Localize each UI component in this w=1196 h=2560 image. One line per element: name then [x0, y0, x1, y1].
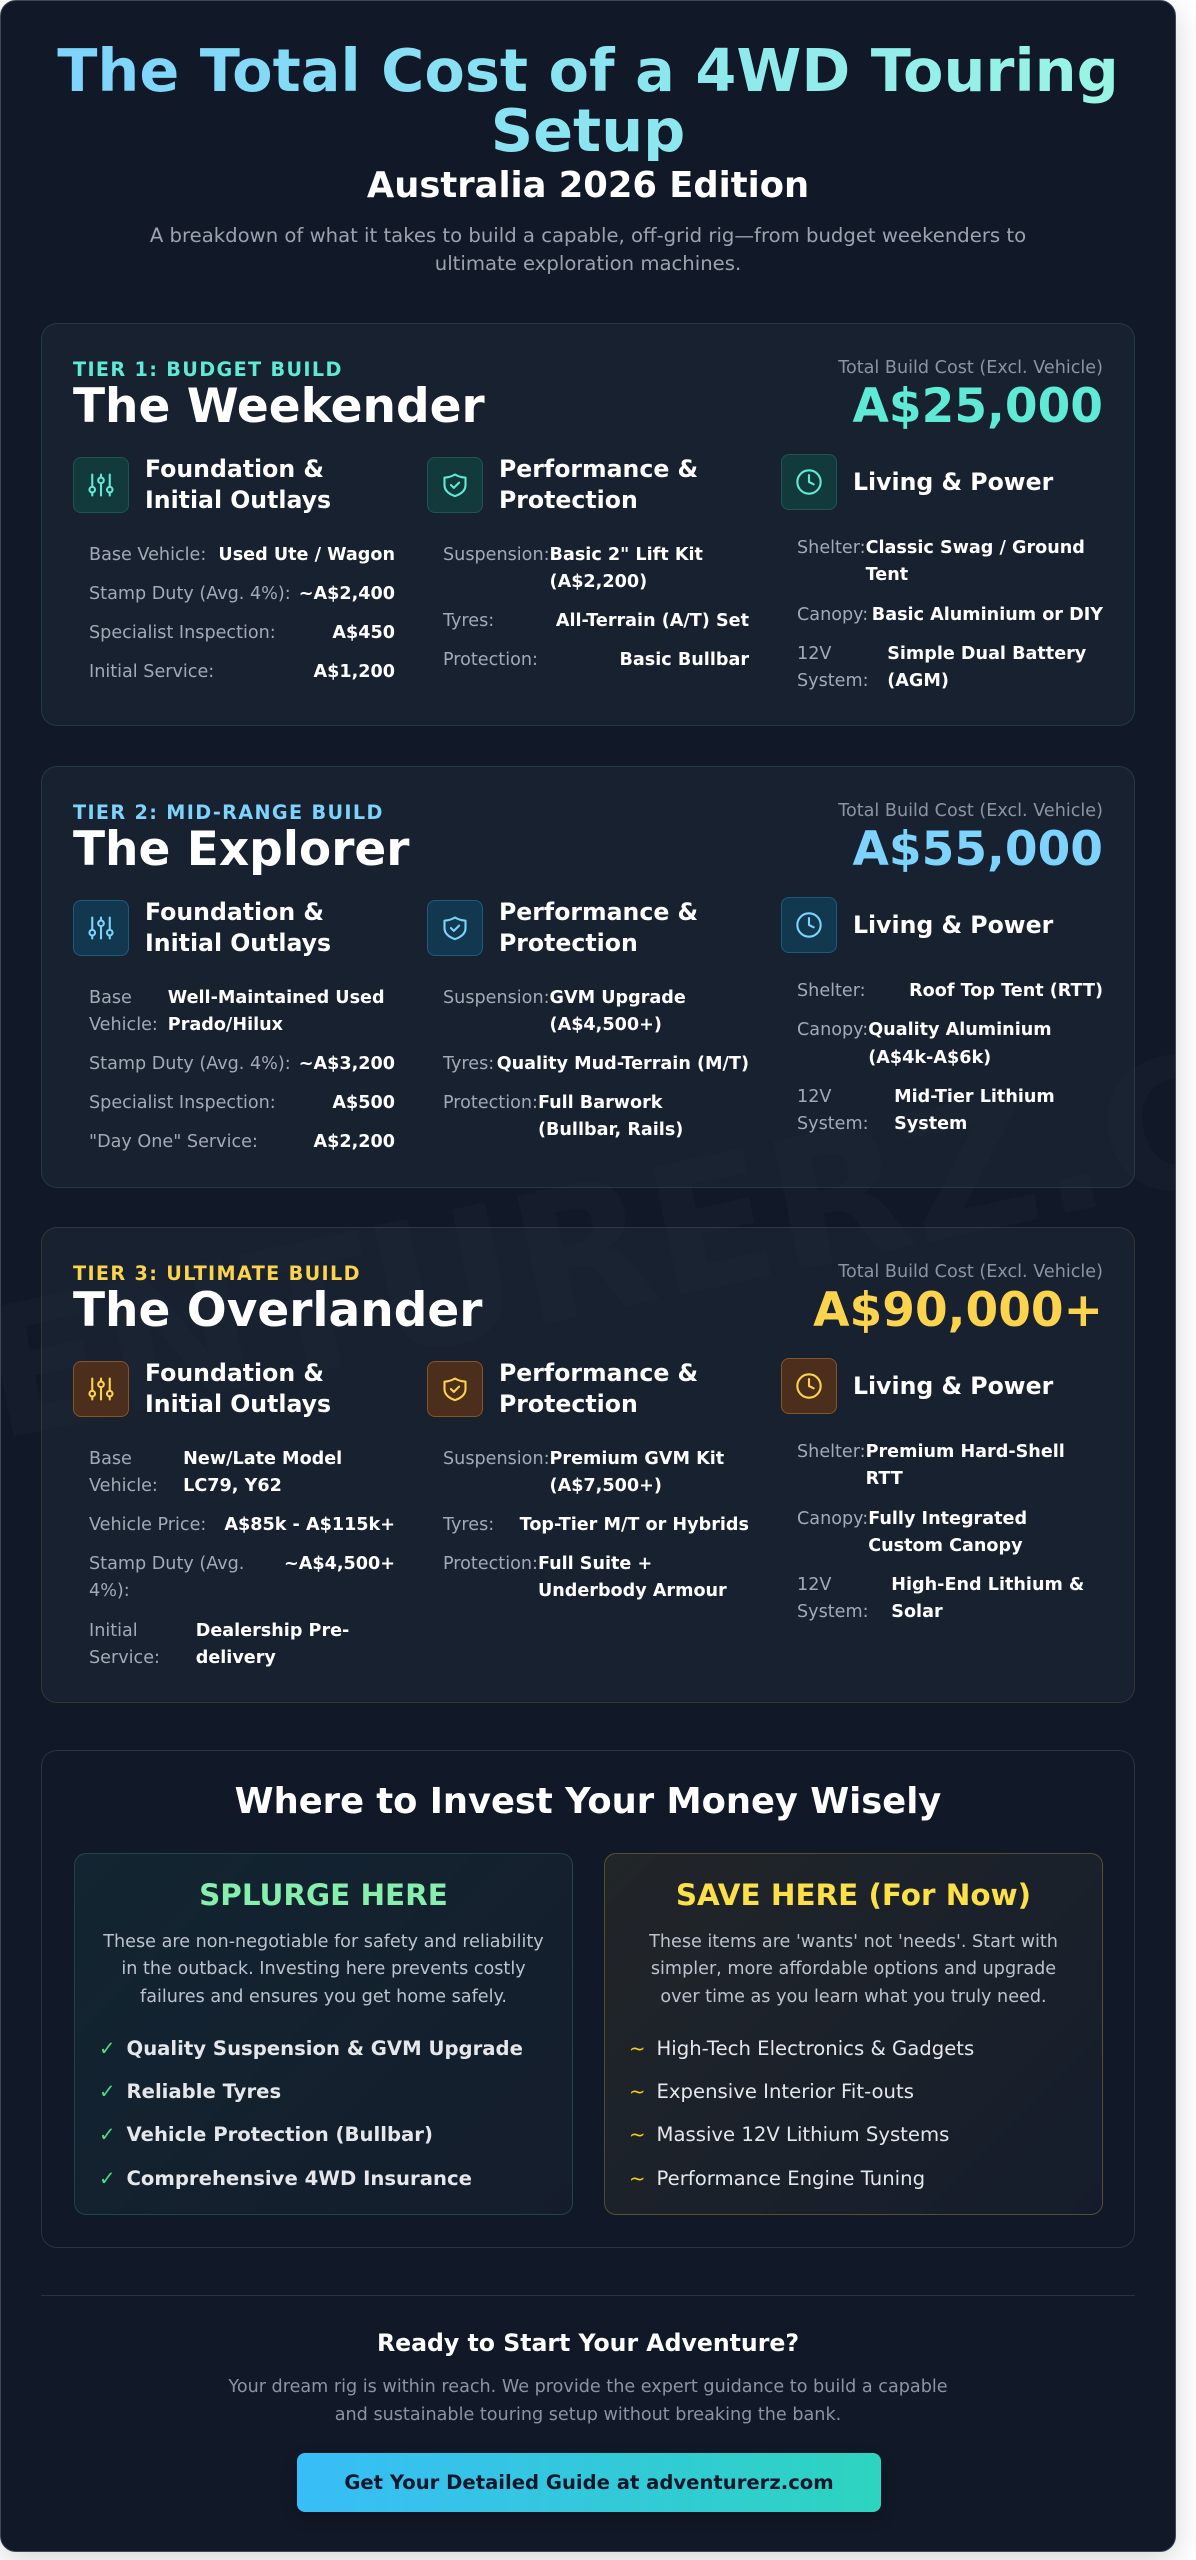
cost rows: Base Vehicle:	[89, 988, 158, 1035]
cost rows: Canopy:	[797, 1020, 868, 1040]
cost rows: ~A$4,500+	[284, 1554, 395, 1574]
panel: tier 1 the weekender	[41, 323, 1135, 726]
tier 3 header: TIER 3: ULTIMATE BUILD	[73, 1262, 361, 1285]
tier 1 header: The Weekender	[73, 379, 485, 434]
cta button	[297, 2453, 881, 2512]
cost rows: New/Late Model LC79, Y62	[183, 1449, 342, 1496]
tier 3 columns	[73, 1358, 1084, 1668]
save description: These items are 'wants' not 'needs'. Start with simpler, more affordable options and upgrade over time as you learn what you truly need.	[649, 1932, 1058, 2007]
cost rows: Quality Mud-Terrain (M/T)	[497, 1054, 749, 1074]
cost rows: Base Vehicle:	[89, 545, 206, 565]
splurge list: Comprehensive 4WD Insurance	[126, 2167, 472, 2190]
heading: living	[781, 1358, 1054, 1414]
splurge list	[99, 2037, 523, 2190]
cost rows: Tyres:	[443, 611, 494, 631]
heading: living	[781, 454, 1054, 510]
save list: High-Tech Electronics & Gadgets	[656, 2037, 974, 2060]
cost rows: High-End Lithium & Solar	[891, 1575, 1084, 1622]
cost rows: 12V System:	[797, 644, 869, 691]
splurge list: Vehicle Protection (Bullbar)	[126, 2123, 433, 2146]
cost rows: A$85k - A$115k+	[224, 1515, 395, 1535]
cost rows: Specialist Inspection:	[89, 1093, 276, 1113]
cost rows: Mid-Tier Lithium System	[894, 1087, 1055, 1134]
cost rows: Suspension:	[443, 545, 550, 565]
heading: living: Living & Power	[853, 1372, 1053, 1400]
cost rows: Canopy:	[797, 1509, 868, 1529]
cost rows: Suspension:	[443, 1449, 550, 1469]
heading: living	[781, 897, 1054, 953]
cost rows: Premium GVM Kit (A$7,500+)	[550, 1449, 724, 1496]
save list: Massive 12V Lithium Systems	[656, 2123, 949, 2146]
cost rows: Classic Swag / Ground Tent	[866, 538, 1085, 585]
heading: living: Living & Power	[853, 468, 1053, 496]
footer call to action	[228, 2329, 948, 2424]
tier 1 header: Total Build Cost (Excl. Vehicle)	[838, 358, 1103, 378]
cost rows: Full Suite + Underbody Armour	[538, 1554, 727, 1601]
splurge list: Quality Suspension & GVM Upgrade	[126, 2037, 523, 2060]
cost rows	[442, 1449, 749, 1601]
cost rows	[89, 1449, 395, 1668]
heading: foundation: Foundation & Initial Outlays	[145, 455, 331, 514]
cost rows: Used Ute / Wagon	[218, 545, 395, 565]
cost rows	[89, 988, 395, 1152]
save list: Expensive Interior Fit-outs	[656, 2080, 914, 2103]
cost rows	[442, 545, 749, 670]
tier 1 header: TIER 1: BUDGET BUILD	[73, 358, 343, 381]
cost rows: Well-Maintained Used Prado/Hilux	[168, 988, 385, 1035]
cost rows: Base Vehicle:	[89, 1449, 158, 1496]
footer heading: Ready to Start Your Adventure?	[377, 2329, 799, 2357]
cost rows: Basic Bullbar	[620, 650, 749, 670]
cost rows: Protection:	[443, 1554, 538, 1574]
column: foundation	[73, 455, 395, 682]
save list: ~	[629, 2037, 645, 2060]
cost rows: 12V System:	[797, 1087, 869, 1134]
cost rows: ~A$2,400	[299, 584, 395, 604]
cost rows: Roof Top Tent (RTT)	[909, 981, 1103, 1001]
splurge list: ✓	[99, 2080, 115, 2103]
tier 3 header: A$90,000+	[813, 1283, 1103, 1338]
footer text: Your dream rig is within reach. We provide the expert guidance to build a capable and sustainable touring setup without breaking the bank.	[228, 2377, 948, 2424]
heading: living: Living & Power	[853, 911, 1053, 939]
cost rows: GVM Upgrade (A$4,500+)	[550, 988, 686, 1035]
tier 2 columns	[73, 897, 1103, 1152]
cost rows: "Day One" Service:	[89, 1132, 258, 1152]
subtitle: Australia 2026 Edition	[367, 165, 809, 206]
cost rows: A$1,200	[313, 662, 395, 682]
tier 2 header	[73, 801, 1103, 877]
cost rows: Basic Aluminium or DIY	[872, 605, 1103, 625]
save heading: SAVE HERE (For Now)	[676, 1878, 1031, 1912]
cost rows: Stamp Duty (Avg. 4%):	[89, 1054, 291, 1074]
save list: ~	[629, 2080, 645, 2103]
tier 2 header: Total Build Cost (Excl. Vehicle)	[838, 801, 1103, 821]
splurge list: Reliable Tyres	[126, 2080, 281, 2103]
cost rows: Dealership Pre-delivery	[196, 1621, 349, 1668]
save list: ~	[629, 2167, 645, 2190]
column: living	[781, 454, 1104, 691]
cost rows: Full Barwork (Bullbar, Rails)	[538, 1093, 683, 1140]
panel: tier 3 the overlander	[41, 1227, 1135, 1703]
tier 3 header	[73, 1262, 1103, 1338]
cost rows: Suspension:	[443, 988, 550, 1008]
cost rows: Shelter:	[797, 1442, 866, 1462]
cost rows	[797, 981, 1103, 1134]
tier 1 columns	[73, 454, 1104, 691]
cost rows: Basic 2" Lift Kit (A$2,200)	[550, 545, 703, 592]
cost rows: A$450	[332, 623, 395, 643]
heading: performance: Performance & Protection	[499, 898, 698, 957]
panel: splurge here	[74, 1853, 573, 2215]
panel: where to invest	[41, 1750, 1135, 2248]
panel: tier 2 the explorer	[41, 766, 1135, 1188]
cost rows: Tyres:	[443, 1515, 494, 1535]
save list	[629, 2037, 974, 2190]
splurge list: ✓	[99, 2037, 115, 2060]
intro text: A breakdown of what it takes to build a capable, off-grid rig—from budget weekenders to ultimate exploration machines.	[150, 224, 1026, 274]
cost rows	[89, 545, 395, 682]
cost rows: ~A$3,200	[299, 1054, 395, 1074]
tier 1 header	[73, 358, 1103, 434]
column: living	[781, 1358, 1084, 1622]
cost rows: 12V System:	[797, 1575, 869, 1622]
cost rows	[442, 988, 749, 1140]
cost rows: Canopy:	[797, 605, 868, 625]
title: The Total Cost of a 4WD Touring Setup	[57, 36, 1119, 165]
cost rows: Top-Tier M/T or Hybrids	[520, 1515, 749, 1535]
heading: foundation: Foundation & Initial Outlays	[145, 1359, 331, 1418]
cost rows: Stamp Duty (Avg. 4%):	[89, 584, 291, 604]
cost rows: Vehicle Price:	[89, 1515, 206, 1535]
tier 2 header: The Explorer	[73, 822, 409, 877]
heading: foundation: Foundation & Initial Outlays	[145, 898, 331, 957]
cost rows: Protection:	[443, 1093, 538, 1113]
splurge list: ✓	[99, 2167, 115, 2190]
cta button: Get Your Detailed Guide at adventurerz.com	[344, 2471, 834, 2494]
tier 2 header: A$55,000	[853, 822, 1103, 877]
column: foundation	[73, 898, 395, 1152]
cost rows: Shelter:	[797, 538, 866, 558]
cost rows: Initial Service:	[89, 662, 214, 682]
panel: save here	[604, 1853, 1103, 2215]
cost rows: All-Terrain (A/T) Set	[556, 611, 749, 631]
cost rows: Shelter:	[797, 981, 866, 1001]
cost rows: Initial Service:	[89, 1621, 160, 1668]
splurge list: ✓	[99, 2123, 115, 2146]
cost rows	[797, 538, 1104, 691]
cost rows: Stamp Duty (Avg. 4%):	[89, 1554, 244, 1601]
invest heading: Where to Invest Your Money Wisely	[235, 1781, 941, 1822]
save list: ~	[629, 2123, 645, 2146]
column: performance	[427, 1359, 749, 1601]
cost rows: Specialist Inspection:	[89, 623, 276, 643]
cost rows: Quality Aluminium (A$4k-A$6k)	[868, 1020, 1052, 1068]
tier 3 header: The Overlander	[73, 1283, 482, 1338]
cost rows: A$500	[332, 1093, 395, 1113]
tier 3 header: Total Build Cost (Excl. Vehicle)	[838, 1262, 1103, 1282]
cost rows: Fully Integrated Custom Canopy	[868, 1509, 1027, 1556]
splurge heading: SPLURGE HERE	[199, 1878, 448, 1912]
splurge description: These are non-negotiable for safety and reliability in the outback. Investing here prevents costly failures and ensures you get home safely.	[103, 1932, 544, 2007]
cost rows: Simple Dual Battery (AGM)	[887, 644, 1086, 691]
cost rows	[797, 1442, 1084, 1622]
heading: performance: Performance & Protection	[499, 1359, 698, 1418]
cost rows: Premium Hard-Shell RTT	[866, 1442, 1065, 1489]
cost rows: A$2,200	[313, 1132, 395, 1152]
heading: performance: Performance & Protection	[499, 455, 698, 514]
save list: Performance Engine Tuning	[656, 2167, 925, 2190]
tier 2 header: TIER 2: MID-RANGE BUILD	[73, 801, 384, 824]
column: foundation	[73, 1359, 395, 1668]
cost rows: Tyres:	[443, 1054, 494, 1074]
column: performance	[427, 898, 749, 1140]
cost rows: Protection:	[443, 650, 538, 670]
column: living	[781, 897, 1103, 1134]
column: performance	[427, 455, 749, 670]
tier 1 header: A$25,000	[853, 379, 1103, 434]
header	[57, 36, 1119, 274]
